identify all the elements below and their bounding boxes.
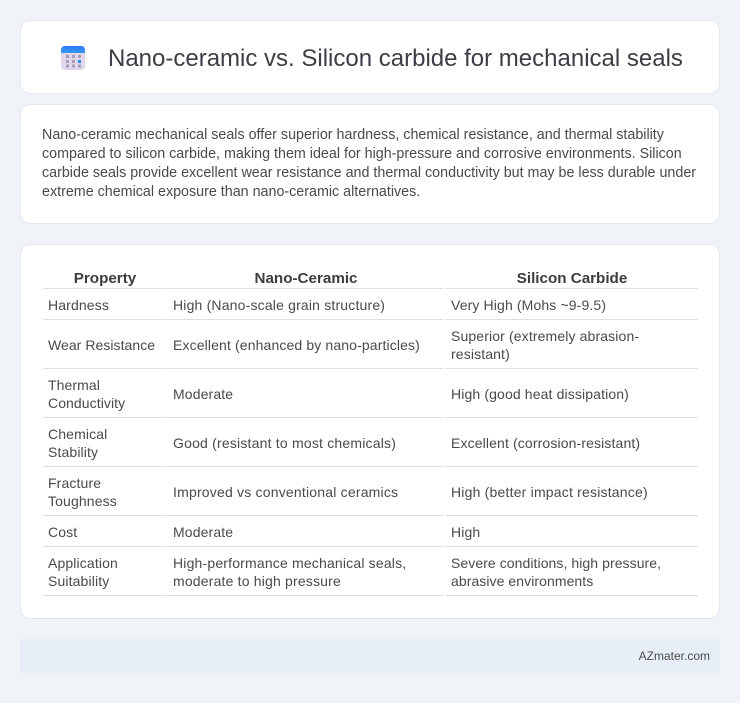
title: Nano-ceramic vs. Silicon carbide for mechanical seals — [108, 45, 683, 72]
row: thermal conductivity: Thermal — [48, 377, 100, 393]
row: application suitability — [48, 555, 661, 589]
text block: summary: extreme chemical exposure than nano-ceramic alternatives. — [42, 184, 420, 200]
text block: summary: Nano-ceramic mechanical seals offer superior hardness, chemical resistance, and thermal stability — [42, 127, 664, 143]
row: hardness: Very High (Mohs ~9-9.5) — [451, 297, 606, 313]
row: application suitability: High-performance mechanical seals, — [173, 555, 406, 571]
row: thermal conductivity: Moderate — [173, 386, 233, 402]
panel: title header — [20, 20, 720, 94]
table header row — [74, 270, 627, 287]
icon: calendar grid — [61, 46, 85, 70]
table header row: Property — [74, 270, 136, 287]
row: chemical stability: Good (resistant to most chemicals) — [173, 435, 396, 451]
row: thermal conductivity: Conductivity — [48, 395, 125, 411]
row: cost — [48, 524, 480, 540]
row: application suitability: Suitability — [48, 573, 109, 589]
row: application suitability: moderate to high pressure — [173, 573, 341, 589]
row: fracture toughness — [48, 475, 648, 509]
row: hardness — [48, 297, 606, 313]
row: hardness: High (Nano-scale grain structure) — [173, 297, 385, 313]
text block: summary — [42, 127, 696, 200]
row: hardness: Hardness — [48, 297, 109, 313]
text block: summary: carbide seals provide excellent wear resistance and thermal conductivity but may be less durable under — [42, 165, 696, 181]
panel: introduction text — [20, 104, 720, 224]
text block: summary: compared to silicon carbide, making them ideal for high-pressure and corrosive environments. Silicon — [42, 146, 682, 162]
footer credit: AZmater.com — [639, 649, 710, 663]
row: fracture toughness: Improved vs conventional ceramics — [173, 484, 398, 500]
row: fracture toughness: Toughness — [48, 493, 117, 509]
row: wear resistance: Excellent (enhanced by nano-particles) — [173, 337, 420, 353]
panel: comparison table — [20, 244, 720, 619]
row: wear resistance — [48, 328, 639, 362]
row: chemical stability: Chemical — [48, 426, 107, 442]
row: chemical stability: Excellent (corrosion-resistant) — [451, 435, 640, 451]
row: cost: High — [451, 524, 480, 540]
row: chemical stability — [48, 426, 640, 460]
row: cost: Moderate — [173, 524, 233, 540]
row: wear resistance: resistant) — [451, 346, 510, 362]
row: application suitability: Application — [48, 555, 118, 571]
row: fracture toughness: High (better impact resistance) — [451, 484, 648, 500]
row: thermal conductivity — [48, 377, 629, 411]
row: application suitability: abrasive environments — [451, 573, 593, 589]
row: thermal conductivity: High (good heat dissipation) — [451, 386, 629, 402]
table header row: Silicon Carbide — [517, 270, 627, 287]
row: wear resistance: Wear Resistance — [48, 337, 155, 353]
row: wear resistance: Superior (extremely abrasion- — [451, 328, 639, 344]
row: fracture toughness: Fracture — [48, 475, 101, 491]
table header row: Nano-Ceramic — [255, 270, 357, 287]
row: chemical stability: Stability — [48, 444, 98, 460]
row: application suitability: Severe conditions, high pressure, — [451, 555, 661, 571]
footer bar — [20, 639, 720, 673]
row: cost: Cost — [48, 524, 77, 540]
